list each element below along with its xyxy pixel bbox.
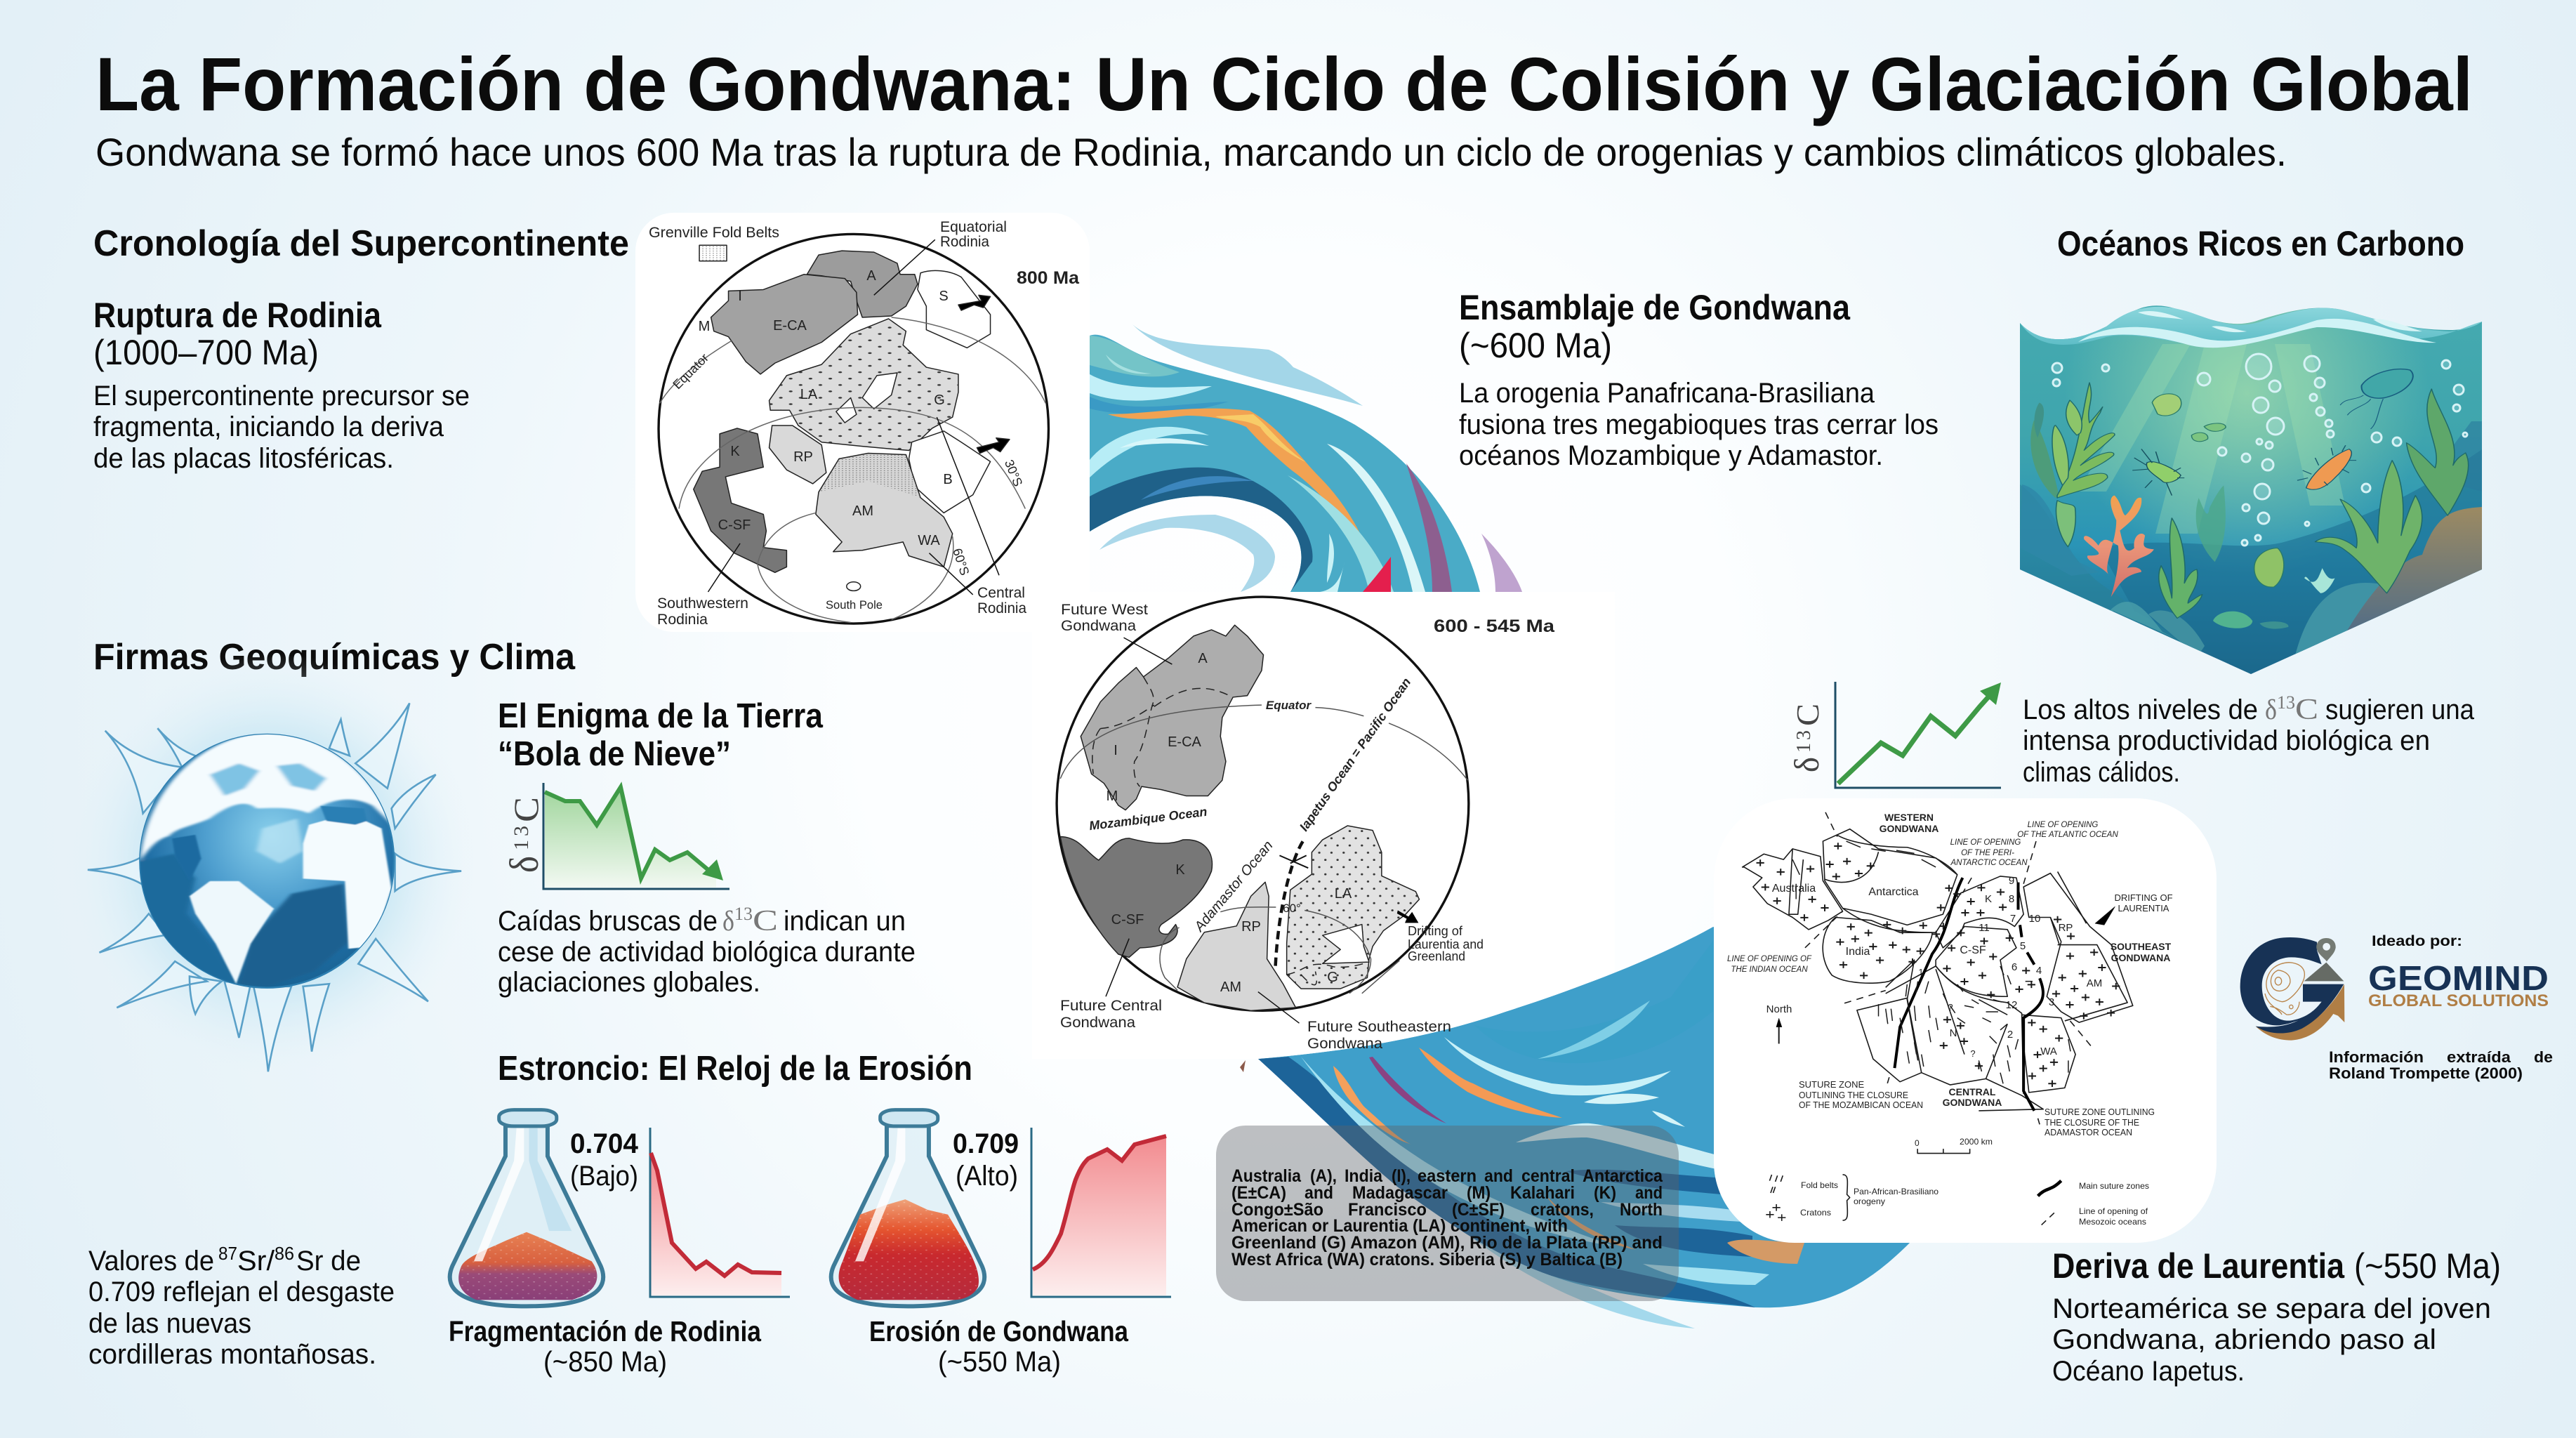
- panel: map 800 Ma: Rodinia: [657, 612, 708, 628]
- text block: caídas: 13: [734, 904, 753, 924]
- panel: map 800 Ma: K: [730, 444, 740, 459]
- text: 0.709: [953, 1128, 1019, 1192]
- panel: map 800 Ma: Equatorial: [940, 219, 1007, 235]
- panel: map Gondwana reconstruction: 12: [2006, 999, 2017, 1011]
- callout: craton legend: (A),: [1310, 1166, 1337, 1186]
- panel: map Gondwana reconstruction: GONDWANA: [1880, 823, 1938, 834]
- panel: map 600-545 Ma: Laurentia and: [1408, 937, 1484, 951]
- icon: flask high: [831, 1110, 984, 1306]
- panel: map 800 Ma: WA: [918, 533, 940, 548]
- seaweed and organisms: [2030, 369, 2469, 629]
- logo: Geomind wordmark: [2368, 960, 2549, 1010]
- heading: ensamblaje: (~600 Ma): [1459, 326, 1612, 365]
- panel: map Gondwana reconstruction: Antarctica: [1868, 886, 1919, 898]
- panel: map Gondwana reconstruction: orogeny: [1854, 1196, 1885, 1206]
- text block: caídas: glaciaciones globales.: [498, 967, 760, 998]
- panel: map 600-545 Ma: Drifting of: [1408, 924, 1463, 938]
- heading: ensamblaje: [1459, 288, 1938, 471]
- text block: altos niveles: [2023, 692, 2475, 788]
- panel: map 800 Ma: I: [738, 289, 742, 304]
- heading: océanos: Océanos Ricos en Carbono: [2057, 224, 2464, 263]
- subtitle: Gondwana se formó hace unos 600 Ma tras la ruptura de Rodinia, marcando un ciclo de orogenias y cambios climáticos globales.: [95, 130, 2287, 174]
- chart: strontium low: [650, 1128, 790, 1297]
- text block: altos niveles: intensa productividad biológica en: [2023, 725, 2430, 756]
- panel: map Gondwana reconstruction: North: [1766, 1003, 1792, 1015]
- chart: δ13C falling: 1: [510, 840, 533, 850]
- callout: craton legend: [1216, 1126, 1679, 1301]
- panel: map Gondwana reconstruction: 2000 km: [1960, 1137, 1993, 1147]
- panel: map Gondwana reconstruction: 9: [2009, 875, 2014, 887]
- callout: craton legend: (K): [1594, 1183, 1616, 1203]
- text: 0.704: 0.704: [570, 1128, 639, 1159]
- panel: map Gondwana reconstruction: GONDWANA: [2111, 952, 2170, 963]
- callout: craton legend: (C±SF): [1452, 1200, 1505, 1220]
- panel: map 600-545 Ma: Future West: [1061, 602, 1148, 618]
- text block: valores Sr: 86: [275, 1243, 294, 1264]
- heading: ensamblaje: La orogenia Panafricana-Brasiliana: [1459, 378, 1875, 409]
- panel: map 800 Ma: RP: [793, 449, 813, 465]
- label: erosión: (~550 Ma): [938, 1345, 1061, 1378]
- text block: valores Sr: 0.709 reflejan el desgaste: [88, 1277, 395, 1307]
- panel: map 800 Ma: [635, 213, 1090, 632]
- panel: map 800 Ma: G: [934, 393, 945, 408]
- panel: map Gondwana reconstruction: 6: [2012, 961, 2017, 973]
- panel: map Gondwana reconstruction: 1: [1918, 967, 1924, 977]
- panel: map Gondwana reconstruction: ANTARCTIC OCEAN: [1950, 859, 2028, 867]
- panel: map Gondwana reconstruction: Cratons: [1800, 1208, 1831, 1218]
- logo: Geomind mark: [2240, 937, 2344, 1041]
- callout: craton legend: Francisco: [1348, 1200, 1427, 1220]
- text block: deriva: [2052, 1246, 2501, 1387]
- panel: map Gondwana reconstruction: 0: [1915, 1138, 1920, 1148]
- panel: map Gondwana reconstruction: 5: [2020, 940, 2026, 952]
- heading: cronología: Cronología del Supercontinente: [93, 223, 629, 264]
- panel: map Gondwana reconstruction: LINE OF OPENING: [1950, 838, 2021, 847]
- panel: map Gondwana reconstruction: WA: [2040, 1045, 2057, 1057]
- panel: map Gondwana reconstruction: Fold belts: [1801, 1180, 1838, 1190]
- chart: δ13C falling: [501, 783, 729, 889]
- chart: δ13C rising: 1: [1793, 743, 1815, 753]
- text block: altos niveles: climas cálidos.: [2023, 757, 2180, 788]
- chart: δ13C falling: δ: [501, 856, 547, 873]
- illustration: frozen earth: [67, 653, 474, 1074]
- text block: altos niveles: sugieren una: [2325, 694, 2475, 725]
- text block: ruptura de Rodinia: (1000–700 Ma): [93, 333, 319, 372]
- panel: map 800 Ma: Rodinia: [977, 600, 1026, 616]
- panel: map Gondwana reconstruction: Pan-African-Brasiliano: [1854, 1187, 1938, 1196]
- callout: craton legend: (M): [1467, 1183, 1491, 1203]
- panel: map 800 Ma: Equator: [670, 350, 711, 392]
- panel: map 600-545 Ma: LA: [1335, 886, 1352, 902]
- text: 0.704: (Bajo): [570, 1161, 638, 1192]
- chart: δ13C falling: 3: [510, 826, 533, 836]
- chart: δ13C rising: [1787, 682, 2001, 788]
- panel: map Gondwana reconstruction: Australia: [1772, 883, 1816, 895]
- text block: caídas: cese de actividad biológica durante: [498, 937, 916, 968]
- text block: bola de nieve: [498, 697, 824, 773]
- heading: ensamblaje: Ensamblaje de Gondwana: [1459, 288, 1851, 327]
- panel: map 600-545 Ma: K: [1175, 862, 1185, 878]
- callout: craton legend: and: [1635, 1183, 1663, 1203]
- panel: swirl upper: [1090, 324, 1522, 592]
- panel: map Gondwana reconstruction: SUTURE ZONE OUTLINING: [2045, 1107, 2155, 1117]
- chart: δ13C falling: C: [506, 797, 546, 822]
- panel: map 800 Ma: 60°S: [950, 546, 972, 577]
- callout: craton legend: and: [1304, 1183, 1333, 1203]
- panel: map 600-545 Ma: I: [1114, 743, 1118, 758]
- text block: ruptura de Rodinia: Ruptura de Rodinia: [93, 296, 382, 335]
- panel: swirl lower: [1240, 927, 1910, 1328]
- panel: map 800 Ma: AM: [852, 503, 873, 519]
- panel: map 600-545 Ma: E-CA: [1168, 734, 1202, 750]
- text block: deriva: (~550 Ma): [2354, 1246, 2501, 1286]
- text block: altos niveles: 13: [2277, 692, 2295, 713]
- panel: map Gondwana reconstruction: [1714, 798, 2217, 1243]
- panel: map Gondwana reconstruction: K: [1985, 893, 1992, 905]
- callout: craton legend: West Africa (WA) cratons. Siberia (S) y Baltica (B): [1231, 1250, 1623, 1269]
- callout: craton legend: Kalahari: [1510, 1183, 1575, 1203]
- chart: δ13C rising: C: [1790, 704, 1825, 726]
- text block: caídas: indican un: [784, 906, 906, 937]
- panel: map 800 Ma: Central: [977, 585, 1025, 601]
- panel: map 800 Ma: A: [866, 268, 876, 284]
- panel: map Gondwana reconstruction: N: [1950, 1027, 1957, 1039]
- panel: map 800 Ma: Southwestern: [657, 595, 748, 612]
- label: fragmentación: (~850 Ma): [543, 1345, 667, 1378]
- panel: map 600-545 Ma: AM: [1220, 979, 1241, 995]
- text block: deriva: Norteamérica se separa del joven: [2052, 1293, 2491, 1324]
- panel: map 600-545 Ma: Mozambique Ocean: [1088, 805, 1208, 833]
- panel: map Gondwana reconstruction: Main suture zones: [2079, 1181, 2149, 1191]
- text block: altos niveles: Los altos niveles de: [2023, 694, 2258, 725]
- callout: craton legend: cratons,: [1531, 1200, 1594, 1220]
- credit: ideado por: Ideado por:: [2372, 933, 2462, 949]
- panel: map Gondwana reconstruction: WESTERN: [1884, 812, 1934, 823]
- logo: Geomind wordmark: GEOMIND: [2368, 960, 2549, 998]
- panel: map Gondwana reconstruction: 3: [2049, 996, 2054, 1008]
- text block: valores Sr: Sr de: [296, 1246, 361, 1277]
- text block: deriva: Deriva de Laurentia: [2052, 1246, 2345, 1286]
- panel: map 800 Ma: S: [939, 289, 949, 304]
- panel: map Gondwana reconstruction: 7: [2010, 913, 2016, 925]
- panel: map Gondwana reconstruction: Mesozoic oceans: [2079, 1217, 2146, 1227]
- label: erosión: Erosión de Gondwana: [869, 1315, 1129, 1347]
- panel: map 600-545 Ma: C-SF: [1111, 912, 1144, 928]
- text: 0.709: (Alto): [956, 1161, 1018, 1192]
- panel: map 600-545 Ma: Greenland: [1408, 949, 1465, 963]
- label: fragmentación: [449, 1315, 762, 1378]
- panel: map 800 Ma: M: [699, 319, 710, 334]
- heading: ensamblaje: océanos Mozambique y Adamastor.: [1459, 440, 1883, 471]
- callout: craton legend: (I),: [1392, 1166, 1411, 1186]
- credit: fuente: extraída: [2447, 1048, 2511, 1066]
- panel: map Gondwana reconstruction: India: [1846, 946, 1870, 958]
- panel: map 600-545 Ma: A: [1198, 651, 1208, 666]
- callout: craton legend: Congo±São: [1231, 1200, 1323, 1220]
- callout: craton legend: central: [1521, 1166, 1575, 1186]
- panel: map 800 Ma: Rodinia: [940, 234, 989, 250]
- logo: Geomind wordmark: GLOBAL SOLUTIONS: [2368, 991, 2549, 1010]
- text block: caídas: C: [753, 905, 778, 937]
- text block: ruptura de Rodinia: [93, 296, 470, 474]
- callout: craton legend: (E±CA): [1231, 1183, 1286, 1203]
- panel: map 600-545 Ma: Future Southeastern: [1307, 1019, 1451, 1035]
- panel: map Gondwana reconstruction: OF THE MOZAMBICAN OCEAN: [1799, 1100, 1923, 1110]
- coral: [2084, 496, 2154, 597]
- panel: map 800 Ma: E-CA: [773, 318, 807, 334]
- panel: map 600-545 Ma: [1032, 592, 1615, 1059]
- text block: deriva: Gondwana, abriendo paso al: [2052, 1324, 2436, 1355]
- text: 0.704: [570, 1128, 639, 1192]
- text block: ruptura de Rodinia: de las placas litosféricas.: [93, 443, 394, 474]
- panel: map 600-545 Ma: Equator: [1266, 699, 1312, 712]
- panel: map Gondwana reconstruction: OF THE ATLANTIC OCEAN: [2017, 831, 2118, 839]
- panel: map Gondwana reconstruction: 11: [1979, 922, 1990, 934]
- panel: map 600-545 Ma: Iapetus Ocean = Pacific Ocean: [1297, 675, 1413, 833]
- panel: map Gondwana reconstruction: 2: [2007, 1029, 2013, 1041]
- panel: map Gondwana reconstruction: RP: [2059, 922, 2073, 934]
- panel: map 600-545 Ma: Adamastor Ocean: [1191, 838, 1276, 935]
- label: erosión: [869, 1315, 1129, 1378]
- chart: δ13C rising: δ: [1787, 757, 1826, 772]
- panel: map 600-545 Ma: Gondwana: [1061, 618, 1136, 634]
- panel: map 800 Ma: C-SF: [718, 517, 751, 533]
- credit: fuente: Información: [2329, 1048, 2424, 1066]
- callout: craton legend: Australia: [1231, 1166, 1302, 1186]
- panel: map Gondwana reconstruction: GONDWANA: [1943, 1097, 2002, 1108]
- panel: map 800 Ma: 800 Ma: [1017, 268, 1080, 288]
- text block: caídas: δ: [722, 905, 734, 937]
- heading: firmas: Firmas Geoquímicas y Clima: [93, 637, 576, 678]
- text block: valores Sr: cordilleras montañosas.: [88, 1339, 376, 1370]
- panel: map 600-545 Ma: Gondwana: [1060, 1015, 1135, 1031]
- chart: δ13C rising: 3: [1793, 730, 1815, 740]
- panel: map Gondwana reconstruction: ?: [1948, 1002, 1953, 1012]
- panel: map 800 Ma: Grenville Fold Belts: [649, 225, 779, 241]
- panel: map 600-545 Ma: M: [1107, 789, 1118, 804]
- text block: ruptura de Rodinia: El supercontinente precursor se: [93, 381, 470, 411]
- panel: map Gondwana reconstruction: AM: [2087, 977, 2102, 989]
- panel: map Gondwana reconstruction: OUTLINING THE CLOSURE: [1799, 1090, 1908, 1100]
- callout: craton legend: Greenland (G) Amazon (AM), Rio de la Plata (RP) and: [1231, 1233, 1663, 1253]
- heading: estroncio: Estroncio: El Reloj de la Erosión: [498, 1050, 972, 1088]
- panel: map 600-545 Ma: RP: [1241, 919, 1261, 935]
- text block: deriva: Océano Iapetus.: [2052, 1356, 2245, 1387]
- credit: fuente: Roland Trompette (2000): [2329, 1064, 2523, 1082]
- panel: map Gondwana reconstruction: LINE OF OPENING: [2028, 821, 2098, 829]
- callout: craton legend: American or Laurentia (LA) continent, with: [1231, 1216, 1568, 1236]
- panel: map 600-545 Ma: Future Central: [1060, 998, 1162, 1014]
- panel: map Gondwana reconstruction: CENTRAL: [1949, 1086, 1996, 1097]
- panel: map Gondwana reconstruction: 8: [2009, 893, 2014, 905]
- panel: map 600-545 Ma: 60°: [1283, 902, 1301, 915]
- text: 0.709: 0.709: [953, 1128, 1019, 1159]
- text block: altos niveles: C: [2295, 694, 2318, 726]
- chart: strontium high: [1031, 1128, 1171, 1297]
- text block: caídas: Caídas bruscas de: [498, 906, 718, 937]
- callout: craton legend: India: [1345, 1166, 1383, 1186]
- panel: map Gondwana reconstruction: OF THE PERI-: [1961, 849, 2014, 857]
- credit: fuente: de: [2534, 1048, 2553, 1066]
- panel: map Gondwana reconstruction: SUTURE ZONE: [1799, 1079, 1865, 1090]
- panel: map Gondwana reconstruction: SOUTHEAST: [2111, 941, 2172, 952]
- text block: valores Sr: 87: [218, 1243, 237, 1264]
- text block: caídas: [498, 904, 916, 998]
- panel: map 600-545 Ma: 600 - 545 Ma: [1434, 616, 1555, 636]
- panel: map 800 Ma: B: [943, 472, 953, 487]
- panel: map 600-545 Ma: Gondwana: [1307, 1036, 1382, 1052]
- panel: map Gondwana reconstruction: THE CLOSURE OF THE: [2045, 1117, 2139, 1128]
- text block: valores Sr: Sr/: [237, 1246, 275, 1277]
- label: fragmentación: Fragmentación de Rodinia: [449, 1315, 762, 1347]
- panel: map Gondwana reconstruction: Line of opening of: [2079, 1206, 2148, 1216]
- icon: flask low: [450, 1110, 603, 1306]
- text block: ruptura de Rodinia: fragmenta, iniciando la deriva: [93, 411, 444, 442]
- panel: map 800 Ma: South Pole: [826, 598, 883, 612]
- illustration: ocean: [2020, 305, 2483, 674]
- panel: map Gondwana reconstruction: LAURENTIA: [2118, 903, 2169, 913]
- panel: map Gondwana reconstruction: THE INDIAN OCEAN: [1731, 965, 1808, 974]
- callout: craton legend: North: [1620, 1200, 1663, 1220]
- bubbles: [2052, 354, 2467, 546]
- text block: altos niveles: δ: [2265, 694, 2277, 725]
- panel: map 600-545 Ma: G: [1327, 970, 1338, 985]
- text block: valores Sr: Valores de: [88, 1246, 214, 1277]
- panel: map Gondwana reconstruction: 10: [2029, 913, 2040, 925]
- callout: craton legend: Madagascar: [1352, 1183, 1448, 1203]
- text block: valores Sr: de las nuevas: [88, 1308, 251, 1339]
- text block: bola de nieve: “Bola de Nieve”: [498, 735, 731, 773]
- text block: bola de nieve: El Enigma de la Tierra: [498, 697, 824, 735]
- callout: craton legend: Antarctica: [1583, 1166, 1663, 1186]
- text block: valores Sr: [88, 1243, 395, 1370]
- panel: map Gondwana reconstruction: LINE OF OPENING OF: [1727, 955, 1812, 963]
- callout: craton legend: and: [1484, 1166, 1513, 1186]
- panel: map Gondwana reconstruction: ?: [1970, 1048, 1976, 1059]
- panel: map Gondwana reconstruction: ADAMASTOR OCEAN: [2045, 1127, 2132, 1137]
- panel: map 800 Ma: 30°S: [1002, 458, 1025, 489]
- panel: map Gondwana reconstruction: 4: [2036, 965, 2042, 977]
- panel: map Gondwana reconstruction: C-SF: [1960, 944, 1986, 956]
- panel: map Gondwana reconstruction: DRIFTING OF: [2114, 892, 2173, 903]
- title: La Formación de Gondwana: Un Ciclo de Colisión y Glaciación Global: [95, 41, 2473, 126]
- panel: map 800 Ma: LA: [800, 387, 818, 402]
- credit: fuente: [2329, 1048, 2553, 1082]
- heading: ensamblaje: fusiona tres megabioques tras cerrar los: [1459, 409, 1938, 440]
- callout: craton legend: eastern: [1418, 1166, 1477, 1186]
